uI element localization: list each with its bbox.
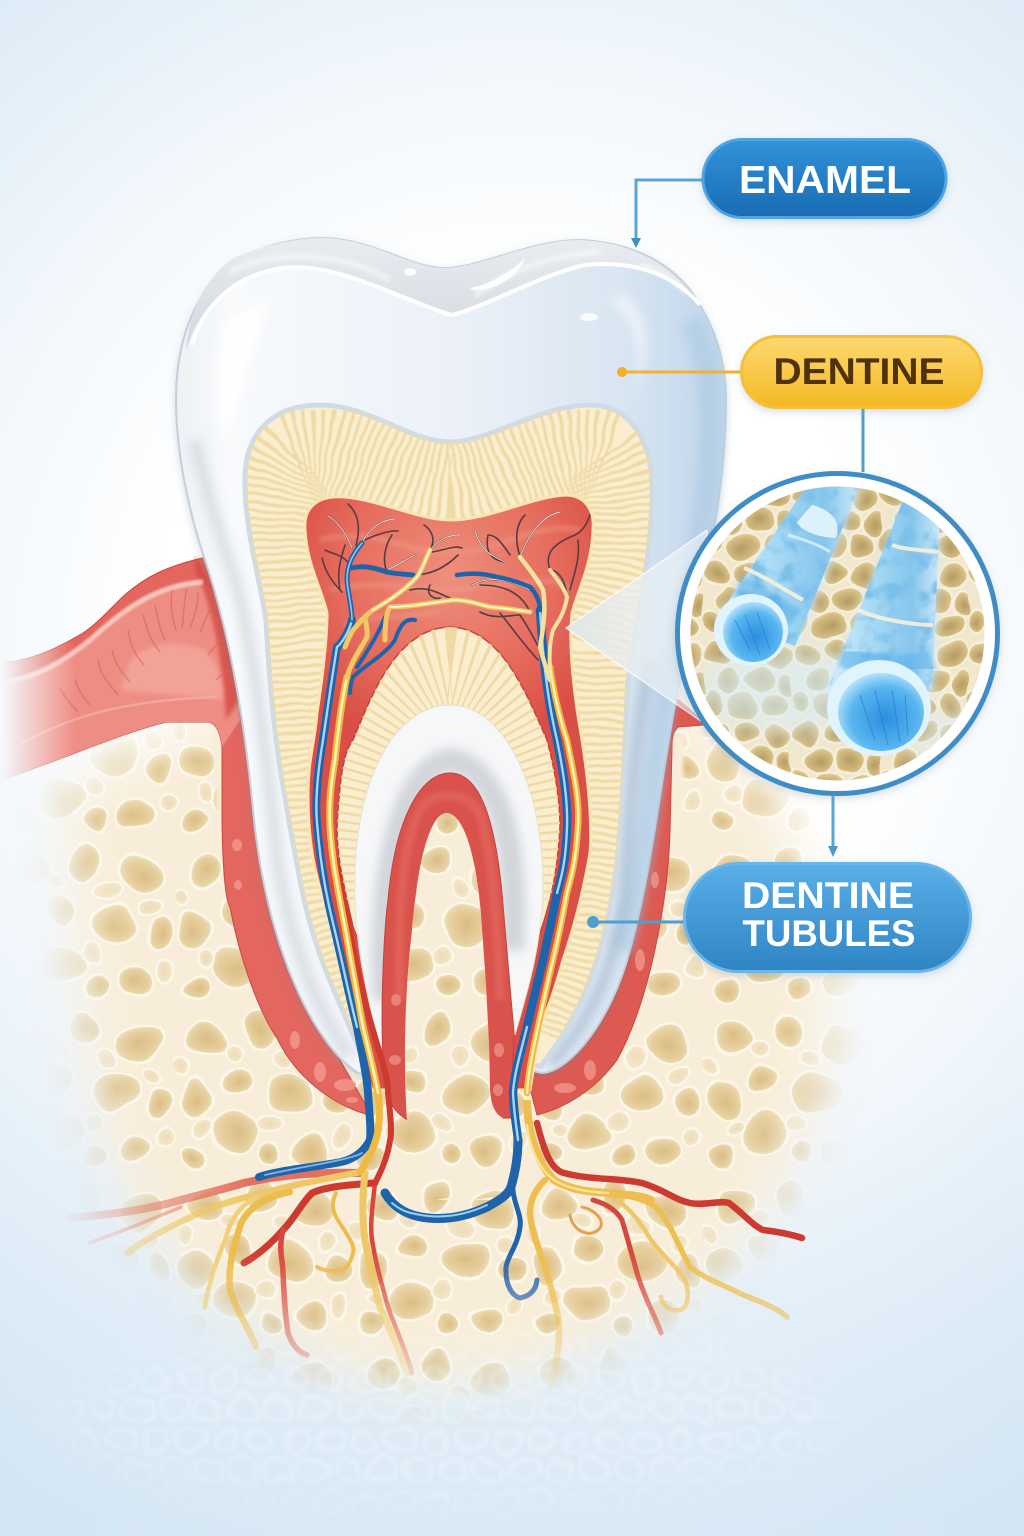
label: dentine tubules: DENTINE (742, 875, 914, 916)
nerves and vessels: pulp chamber branches (322, 504, 590, 693)
tooth: enamel (176, 238, 726, 1074)
gum: inner arch (382, 773, 514, 1120)
nerves and vessels: right canal bundle (513, 610, 578, 1140)
jaw bone (35, 692, 856, 1418)
tooth: inner white layer (355, 705, 543, 1057)
gum: left (0, 557, 372, 1116)
tooth: inner dentine arch (337, 627, 560, 1000)
right tubule (827, 502, 940, 756)
connector: tubules (587, 916, 686, 928)
label: dentine tubules: TUBULES (742, 913, 916, 954)
nerves and vessels: left canal bundle (316, 620, 391, 1183)
connector: dentine (617, 367, 742, 377)
label: dentine: DENTINE (774, 351, 944, 392)
left tubule (714, 486, 858, 666)
label: enamel (703, 140, 946, 218)
bone: between the roots (402, 813, 510, 1200)
gum: right (520, 686, 705, 1115)
connector: dentine to magnified view (862, 409, 864, 472)
tooth: pulp chamber and canals (305, 495, 593, 1090)
label: enamel: ENAMEL (739, 159, 911, 202)
connector: enamel (631, 180, 702, 248)
tooth: dentine (245, 405, 652, 1066)
nerves and vessels: lower branches (70, 1093, 802, 1387)
label: dentine (742, 336, 982, 408)
callout pointer (566, 530, 707, 722)
magnified view: dentine tubules (678, 474, 1000, 794)
enamel glass cap (186, 238, 700, 350)
label: dentine tubules (684, 864, 970, 972)
connector: magnified view to tubules label (828, 796, 838, 857)
